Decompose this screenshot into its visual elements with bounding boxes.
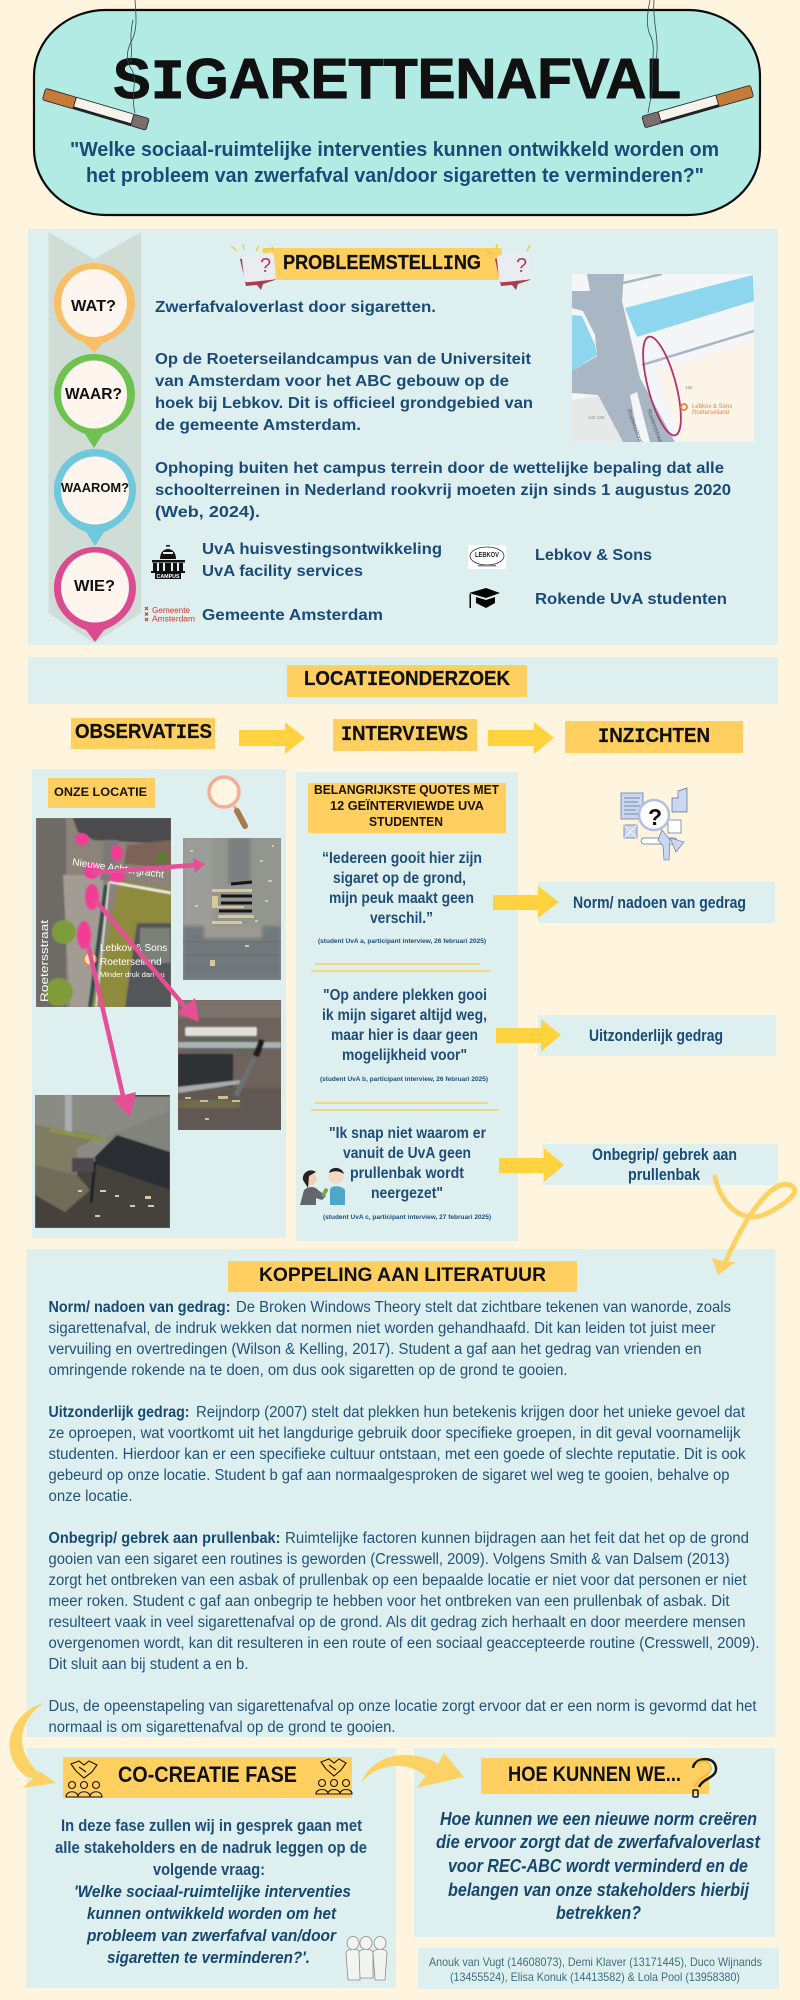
- map of the location: Lebkov & Sons: [692, 404, 732, 410]
- text: hoe kunnen we question: [436, 1809, 761, 1923]
- panel: koppeling aan literatuur: [26, 1249, 776, 1737]
- text: waar: de gemeente Amsterdam.: [155, 417, 361, 434]
- icon: left cigarette: [42, 88, 149, 130]
- text: norm: De Broken Windows Theory stelt dat zichtbare tekenen van wanorde, zoals: [236, 1299, 731, 1316]
- stakeholders text: UvA facility services: [202, 563, 363, 580]
- panel: hoe kunnen we: [414, 1748, 775, 1937]
- panel: names: [418, 1948, 779, 1989]
- icon: right smoke: [647, 0, 657, 113]
- icon: people right: [316, 1780, 352, 1794]
- heading: quotes: [308, 783, 506, 833]
- text: onbegrip: meer roken. Student c gaf aan onbegrip te hebben voor het ontbreken van een prullenbak of asbak. Dit: [48, 1593, 730, 1610]
- quote 2: [320, 987, 488, 1083]
- research question: het probleem van zwerfafval van/door sigaretten te verminderen?": [86, 165, 704, 187]
- text: hoe kunnen we question: belangen van onze stakeholders hierbij: [448, 1880, 750, 1900]
- map of the location: 142 138: [588, 415, 605, 420]
- text: norm: [48, 1299, 731, 1379]
- map of the location: 155: [685, 385, 693, 390]
- icon: left smoke: [127, 0, 136, 113]
- heading: co-creatie fase: CO-CREATIE FASE: [118, 1762, 297, 1787]
- arrow: quote 3 to insight: [499, 1148, 564, 1182]
- insight box: onbegrip: [542, 1144, 778, 1185]
- heading: koppeling aan literatuur: KOPPELING AAN LITERATUUR: [259, 1265, 546, 1286]
- icon: lebkov logo: [468, 545, 506, 569]
- quote 3: neergezet": [371, 1185, 443, 1202]
- marker: wie: WIE?: [74, 578, 115, 595]
- map of the location: Roetersstraat: [625, 409, 643, 445]
- text: onbegrip: Ruimtelijke factoren kunnen bijdragen aan het feit dat het op de grond: [285, 1530, 749, 1547]
- research question: [70, 139, 719, 187]
- text: waarom: schoolterreinen in Nederland rookvrij moeten zijn sinds 1 augustus 2020: [155, 482, 731, 499]
- arrow: co-creatie to hoe kunnen we: [361, 1753, 464, 1788]
- icon: campus: CAMPUS: [156, 574, 180, 580]
- icon: gemeente amsterdam logo: Amsterdam: [152, 614, 195, 624]
- quote 3: vanuit de UvA geen: [343, 1145, 471, 1162]
- text: uitzonderlijk: Uitzonderlijk gedrag:: [48, 1404, 190, 1421]
- text: waarom: (Web, 2024).: [155, 504, 260, 521]
- icon: group of people: [346, 1936, 387, 1980]
- quote 3: prullenbak wordt: [350, 1165, 464, 1182]
- text: hoe kunnen we question: voor REC-ABC wordt verminderd en de: [448, 1856, 748, 1876]
- text: waarom: Ophoping buiten het campus terrein door de wettelijke bepaling dat alle: [155, 460, 724, 477]
- aerial photo: Lebkov & Sons: [100, 943, 167, 954]
- text: waar: van Amsterdam voor het ABC gebouw op de: [155, 373, 509, 390]
- text: uitzonderlijk: ze oproepen, wat voortkomt uit het langdurige gebruik door specifieke groepen, in dit geval voornamelijk: [48, 1425, 741, 1442]
- stakeholders text: [202, 541, 727, 624]
- quote 2: "Op andere plekken gooi: [323, 987, 487, 1004]
- panel: locatieonderzoek heading: LOCATIEONDERZOEK: [304, 668, 511, 692]
- stakeholders text: UvA huisvestingsontwikkeling: [202, 541, 442, 558]
- text: hoe kunnen we question: die ervoor zorgt dat de zwerfafvaloverlast: [436, 1832, 761, 1852]
- panel: names: (13455524), Elisa Konuk (14413582) & Lola Pool (13958380): [450, 1970, 740, 1984]
- text: norm: vervuiling en overtredingen (Wilson & Kelling, 2017). Student a gaf aan het gedrag van vrienden en: [48, 1341, 702, 1358]
- arrow: quote 1 to insight: [493, 886, 559, 918]
- marker: wie: [54, 547, 136, 642]
- panel: interviews: [296, 772, 518, 1241]
- arrow: observaties to interviews: [239, 722, 305, 754]
- marker: waarom: WAAROM?: [61, 480, 129, 495]
- quote 2: maar hier is daar geen: [331, 1027, 478, 1044]
- label: onze locatie: [48, 778, 155, 808]
- text: onbegrip: Dit sluit aan bij student a en b.: [48, 1656, 248, 1673]
- text: onbegrip: gooien van een sigaret een routines is geworden (Cresswell, 2009). Volgens Smith & van Dalsem (2013): [48, 1551, 730, 1568]
- stakeholders text: Rokende UvA studenten: [535, 591, 727, 608]
- heading: co-creatie fase: [63, 1757, 352, 1798]
- panel: observaties: [32, 769, 286, 1238]
- heading: observaties: OBSERVATIES: [75, 721, 212, 745]
- text: onbegrip: resulteert vaak in veel sigarettenafval op de grond. Als dit gedrag zich herhaalt en door meerdere mensen: [48, 1614, 746, 1631]
- icon: handshake left: [71, 1761, 97, 1778]
- text: wat: Zwerfafvaloverlast door sigaretten.: [155, 299, 436, 316]
- text: conclusie: Dus, de opeenstapeling van sigarettenafval op onze locatie zorgt ervoor dat er een norm is gevormd dat het: [48, 1698, 757, 1715]
- text: uitzonderlijk: studenten. Hierdoor kan er een specifieke cultuur ontstaan, met een goede of slechte reputatie. Dit is ook: [48, 1446, 746, 1463]
- icon: right question bubble: ?: [516, 255, 527, 277]
- quote 1: mijn peuk maakt geen: [329, 890, 474, 907]
- stakeholders text: Lebkov & Sons: [535, 547, 652, 564]
- heading: inzichten: INZICHTEN: [598, 725, 710, 749]
- icon: right cigarette: [642, 85, 754, 128]
- heading: quotes: STUDENTEN: [369, 815, 443, 829]
- icon: interview people: [300, 1168, 345, 1205]
- text: waar: [155, 351, 533, 434]
- text: waar: hoek bij Lebkov. Dit is officieel grondgebied van: [155, 395, 533, 412]
- ribbon: [48, 232, 141, 643]
- quote 1: verschil.”: [370, 910, 433, 927]
- icon: lebkov logo: LEBKOV: [475, 552, 499, 559]
- panel: header banner: [34, 0, 760, 215]
- icon: right question bubble: [485, 244, 531, 290]
- aerial photo: Roeterseiland: [100, 957, 162, 968]
- icon: left question bubble: [231, 244, 276, 290]
- arrow: interviews to inzichten: [488, 722, 554, 754]
- icon: graduation cap: [469, 588, 500, 608]
- text: norm: sigarettenafval, de indruk wekken dat normen niet worden gehandhaafd. Dit kan leiden tot juist meer: [48, 1320, 716, 1337]
- icon: campus: [151, 545, 185, 580]
- icon: inzichten illustration: ?: [648, 804, 662, 830]
- heading: koppeling aan literatuur: [228, 1261, 577, 1292]
- icon: gemeente amsterdam logo: [145, 606, 195, 624]
- quote 2: (student UvA b, participant interview, 26 februari 2025): [320, 1077, 488, 1083]
- text: co-creatie description: alle stakeholders en de nadruk leggen op de: [55, 1839, 367, 1857]
- icon: gemeente amsterdam logo: Gemeente: [152, 606, 191, 615]
- arrow: aerial to drain photo: [92, 858, 205, 873]
- heading: quotes: BELANGRIJKSTE QUOTES MET: [314, 783, 499, 797]
- text: uitzonderlijk: [48, 1404, 746, 1505]
- heading: hoe kunnen we: HOE KUNNEN WE...: [508, 1763, 681, 1786]
- icon: handshake right: [321, 1759, 346, 1776]
- insight box: onbegrip: prullenbak: [628, 1166, 701, 1184]
- marker: wat: [54, 263, 135, 353]
- text: onbegrip: Onbegrip/ gebrek aan prullenbak:: [48, 1530, 280, 1547]
- insight box: uitzonderlijk: [538, 1015, 776, 1056]
- icon: left question bubble: ?: [260, 255, 271, 277]
- insight box: norm: [538, 882, 775, 923]
- quote 1: sigaret op de grond,: [333, 870, 466, 887]
- marker: waar: [54, 354, 135, 448]
- curly arrow: insights to literature: [712, 1177, 795, 1275]
- text: uitzonderlijk: gebeurd op onze locatie. Student b gaf aan normaalgesproken de sigaret wel weg te gooien, behalve op: [48, 1467, 730, 1484]
- label: onze locatie: ONZE LOCATIE: [54, 785, 147, 799]
- text: co-creatie description: 'Welke sociaal-ruimtelijke interventies: [74, 1883, 351, 1901]
- text: norm: Norm/ nadoen van gedrag:: [48, 1299, 230, 1316]
- panel: locatieonderzoek heading: [28, 657, 778, 704]
- text: onbegrip: overgenomen wordt, kan dit resulteren in een route of een sociaal geaccepteerde routine (Cresswell, 2009).: [48, 1635, 760, 1652]
- icon: magnifier: [209, 777, 245, 826]
- text: co-creatie description: sigaretten te verminderen?'.: [107, 1949, 310, 1967]
- panel: names: Anouk van Vugt (14608073), Demi Klaver (13171445), Duco Wijnands: [429, 1955, 762, 1969]
- quote 3: "Ik snap niet waarom er: [329, 1125, 486, 1142]
- heading: inzichten: [565, 721, 743, 753]
- quote 3: (student UvA c, participant interview, 27 februari 2025): [323, 1215, 491, 1221]
- text: conclusie: [48, 1698, 757, 1736]
- marker: waarom: [54, 449, 136, 546]
- stakeholders text: Gemeente Amsterdam: [202, 607, 383, 624]
- photo: bench on pavement: [35, 1095, 170, 1228]
- quote 1: “Iedereen gooit hier zijn: [322, 850, 482, 867]
- heading: hoe kunnen we: [481, 1758, 709, 1794]
- map of the location: [572, 274, 754, 445]
- title: SIGARETTENAFVAL: [113, 47, 681, 116]
- heading: probleemstelling: [263, 248, 502, 280]
- marker: waar: WAAR?: [65, 386, 122, 403]
- text: onbegrip: [48, 1530, 760, 1673]
- arrow: aerial to bench photo: [88, 945, 136, 1117]
- quote 1: [318, 850, 486, 945]
- insight box: norm: Norm/ nadoen van gedrag: [573, 894, 746, 912]
- aerial photo: Nieuwe Achtergracht: [72, 857, 165, 881]
- text: conclusie: normaal is om sigarettenafval op de grond te gooien.: [48, 1719, 396, 1736]
- text: co-creatie description: kunnen ontwikkeld worden om het: [87, 1905, 337, 1923]
- text: waar: Op de Roeterseilandcampus van de Universiteit: [155, 351, 532, 368]
- text: hoe kunnen we question: Hoe kunnen we een nieuwe norm creëren: [440, 1809, 757, 1829]
- icon: question mark: [693, 1759, 716, 1797]
- text: onbegrip: zorgt het ontbreken van een asbak of prullenbak op een bepaalde locatie er niet voor dat personen er niet: [48, 1572, 747, 1589]
- insight box: uitzonderlijk: Uitzonderlijk gedrag: [589, 1027, 723, 1045]
- panel: probleemstelling: [28, 229, 778, 645]
- quote 2: ik mijn sigaret altijd weg,: [322, 1007, 487, 1024]
- quote 3: [323, 1125, 491, 1221]
- icon: inzichten illustration: [621, 788, 687, 860]
- heading: interviews: [333, 719, 477, 751]
- text: waarom: [155, 460, 731, 521]
- heading: interviews: INTERVIEWS: [341, 723, 468, 747]
- insight box: onbegrip: Onbegrip/ gebrek aan: [592, 1146, 737, 1164]
- map of the location: Roetersstraat: [645, 409, 663, 445]
- photo: bench with ashtray: [178, 1000, 281, 1130]
- heading: probleemstelling: PROBLEEMSTELLING: [283, 252, 481, 276]
- text: co-creatie description: probleem van zwerfafval van/door: [86, 1927, 337, 1945]
- text: uitzonderlijk: Reijndorp (2007) stelt dat plekken hun betekenis krijgen door het unieke gevoel dat: [196, 1404, 746, 1421]
- arrow: aerial to ashtray photo: [95, 900, 199, 1022]
- text: co-creatie description: [55, 1817, 367, 1967]
- text: co-creatie description: volgende vraag:: [153, 1861, 265, 1879]
- text: hoe kunnen we question: betrekken?: [556, 1903, 641, 1923]
- quote 1: (student UvA a, participant interview, 26 februari 2025): [318, 939, 486, 945]
- heading: quotes: 12 GEÏNTERVIEWDE UVA: [330, 798, 484, 813]
- arrow: literature to co-creatie: [10, 1703, 56, 1788]
- photo: drain: [183, 838, 281, 980]
- quote 2: mogelijkheid voor": [342, 1047, 467, 1064]
- arrow: quote 2 to insight: [496, 1019, 561, 1052]
- research question: "Welke sociaal-ruimtelijke interventies kunnen ontwikkeld worden om: [70, 139, 719, 161]
- panel: co-creatie fase: [26, 1748, 396, 1988]
- aerial photo: Roetersstraat: [39, 920, 51, 1002]
- text: norm: omringende rokende na te doen, om dus ook sigaretten op de grond te gooien.: [48, 1362, 568, 1379]
- text: co-creatie description: In deze fase zullen wij in gesprek gaan met: [61, 1817, 362, 1835]
- aerial photo: [36, 818, 171, 1007]
- marker: wat: WAT?: [71, 298, 116, 315]
- text: uitzonderlijk: onze locatie.: [48, 1488, 132, 1505]
- icon: people left: [66, 1782, 102, 1797]
- map of the location: Roeterseiland: [692, 410, 729, 416]
- aerial photo: Minder druk dan nu: [100, 970, 165, 979]
